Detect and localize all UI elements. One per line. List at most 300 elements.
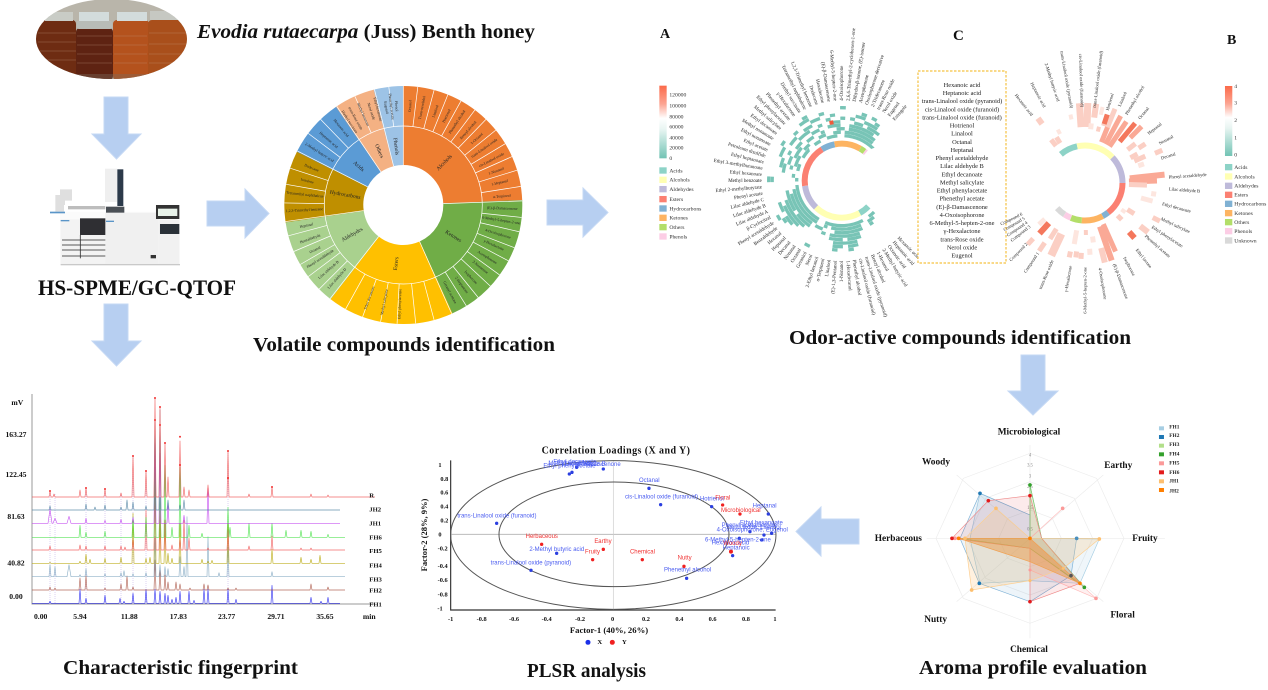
fingerprint: sample labels: FH6	[369, 535, 383, 542]
PLSR: X loadings: Methyl salicylate	[548, 461, 593, 467]
legend: panel A colour scale and categories: Alcohols	[669, 178, 690, 184]
sunburst: category labels	[329, 137, 462, 271]
title: honey sample: Evodia rutaecarpa (Juss) Benth honey	[196, 21, 535, 43]
heatmap B: compound labels: Heptanal	[1147, 121, 1163, 136]
PLSR: tick labels: 1	[438, 462, 442, 469]
heatmap B: compound labels: trans-Linalool oxide (furanoid)	[1092, 50, 1104, 108]
sunburst: compound labels: Phenol	[394, 101, 399, 112]
heatmap B: compound labels: 2-Methyl butyric acid	[1044, 62, 1061, 103]
panel: odor-active compound list: Hotrienol	[950, 122, 974, 130]
fingerprint: axis labels: 40.82	[7, 558, 25, 567]
sunburst: compound labels: Linalool	[432, 105, 440, 118]
sunburst: compound labels: 1-Heptanol	[491, 179, 509, 187]
legend: panel A colour scale and categories: 80000	[669, 114, 684, 120]
PLSR: Y loadings: Chemical	[630, 550, 655, 556]
heatmap B: compound labels: Compound 1	[1023, 251, 1040, 274]
sunburst: compound labels: Eugenol	[383, 101, 389, 114]
heatmap B: compound labels: trans-Linalool oxide (pyranoid)	[1059, 51, 1074, 109]
PLSR: X loadings: cis-Linalool oxide (furanoid)	[625, 495, 698, 501]
legend: panel B colour scale and categories: 2	[1234, 118, 1237, 124]
heatmap A: compound labels: Linalool	[825, 259, 833, 277]
sunburst: compound labels: γ-Hexalactone	[483, 239, 505, 252]
heatmap B: compound labels: 4-Oxoisophorone	[1097, 267, 1108, 300]
panel: odor-active compound list: Methyl salicylate	[940, 180, 984, 186]
heatmap A: compound labels: Ethyl acetate	[742, 139, 769, 154]
sunburst: compound labels: trans-Rose oxide	[347, 106, 363, 131]
panel: odor-active compound list: Heptanoic acid	[943, 90, 982, 97]
heatmap B: compound labels: Ethyl lactate	[1135, 248, 1153, 269]
heatmap B: compound labels: Ethyl phenylacetate	[1151, 224, 1184, 248]
title: PLSR: PLSR analysis	[527, 660, 646, 682]
panel: odor-active compound list: Lilac aldehyde B	[940, 163, 984, 170]
heatmap A: compound labels: Nonanal	[783, 244, 798, 261]
radar: axis values	[1027, 453, 1034, 532]
heatmap A: compound labels: trans-Rose oxide	[877, 78, 897, 111]
PLSR: x-axis title: Factor-1 (40%, 26%)	[570, 625, 648, 635]
panel: odor-active compound list: Ethyl phenylacetate	[937, 188, 987, 194]
heatmap A: compound labels: 1-Hexadecanol	[844, 260, 852, 292]
heatmap B: compound labels: Compound 2	[1008, 241, 1029, 262]
title: odor-active compounds: Odor-active compounds identification	[789, 327, 1131, 349]
legend: panel B colour scale and categories: Aldehydes	[1234, 184, 1259, 190]
panel: odor-active compound list: Octanal	[952, 139, 972, 146]
PLSR: tick labels: -0.2	[438, 546, 448, 553]
sunburst: category labels: Acids	[352, 160, 365, 173]
heatmap A: compound labels: Phenethyl alcohol	[851, 259, 861, 296]
heatmap B: compound labels	[1000, 50, 1207, 314]
radar: axis labels: Chemical	[1010, 645, 1048, 655]
legend: panel B colour scale and categories: Esters	[1234, 193, 1248, 199]
PLSR: X loadings: Lilac aldehyde B	[562, 462, 606, 468]
heatmap B: compound labels: Phenyl acetaldehyde	[1169, 172, 1207, 180]
PLSR: X loadings: Octanal	[639, 478, 660, 484]
panel: odor-active compound list: 4-Oxoisophorone	[940, 212, 985, 219]
heatmap A: compound labels: Ethyl hexanoate	[729, 170, 763, 178]
sunburst: compound labels: Nerol oxide	[366, 102, 376, 121]
sunburst: compound labels: 1,2,3-Trimethyl benzene	[286, 207, 324, 214]
sunburst: outer ring	[264, 66, 542, 344]
heatmap B: compound labels: Isophorone	[1122, 256, 1136, 277]
heatmap A: compound labels: Hexanoic acid	[896, 236, 920, 260]
sunburst: compound labels	[286, 93, 521, 319]
radar: axis labels	[875, 427, 1158, 655]
fingerprint: sample labels: FH2	[369, 587, 383, 594]
radar: axis labels: Floral	[1110, 611, 1135, 621]
sunburst: compound labels: 2-Methyl butyric acid	[304, 142, 335, 163]
heatmap A: compound labels: γ-Hexalactone	[775, 92, 796, 119]
fingerprint: axes	[32, 394, 375, 604]
radar: legend: FH5	[1169, 461, 1180, 467]
legend: panel B colour scale and categories: 1	[1234, 135, 1237, 141]
heatmap A: compound labels: Heptanal	[771, 236, 788, 253]
fingerprint: trace JH1	[32, 443, 340, 523]
PLSR: tick labels: 0.4	[675, 616, 684, 623]
radar: legend: FH2	[1169, 433, 1180, 439]
PLSR: tick labels: -0.8	[438, 591, 448, 598]
heatmap A: compound labels: Eugenol	[888, 101, 902, 118]
PLSR: tick labels: -0.6	[438, 577, 448, 584]
title: volatile compounds: Volatile compounds identification	[253, 334, 555, 356]
sunburst: compound labels: Lilac aldehyde B	[317, 260, 340, 280]
sunburst: compound labels: 1-Octanol	[470, 132, 484, 145]
PLSR: X loadings: Heptanoic	[723, 546, 750, 552]
panel: odor-active compound list: Linalool	[951, 130, 973, 138]
sunburst: compound labels: Trans-nerolidol	[418, 96, 426, 120]
radar: axis values: 0.5	[1027, 527, 1034, 532]
PLSR: Y loadings: Herbaceous	[526, 534, 558, 540]
sunburst: compound labels: 1-Nonanol	[488, 166, 505, 176]
sunburst: compound labels: Phenethyl alcohol	[448, 109, 466, 135]
heatmap A: compound labels: α-Terpineol	[816, 258, 827, 282]
legend: panel B colour scale and categories: Unknown	[1234, 238, 1257, 244]
heatmap A: cells	[738, 77, 945, 284]
heatmap A: compound labels: trans-Linalool oxide (pyranoid)	[863, 256, 887, 318]
heatmap B: compound labels: 6-Methyl-5-hepten-2-one	[1082, 267, 1088, 314]
fingerprint: axis labels: mV	[11, 398, 24, 407]
sunburst: compound labels: Diethyl succinate	[340, 110, 358, 134]
panel: odor-active compound list: Phenethyl acetate	[940, 196, 985, 202]
fingerprint: axis labels: 122.45	[5, 470, 27, 479]
fingerprint: trace R	[32, 398, 375, 497]
panel: odor-active compound list: Hexanoic acid	[944, 82, 981, 89]
sunburst: compound labels: Lilac aldehyde D	[327, 267, 347, 290]
PLSR: X loadings: Phenyl acetaldehyde	[722, 523, 778, 529]
heatmap B: cells	[1026, 103, 1165, 263]
fingerprint: trace FH1	[32, 585, 340, 603]
heatmap A: compound labels: Phenethyl acetate	[764, 92, 791, 123]
PLSR: X loadings: 6-Methyl-5-hepten-2-one	[705, 538, 772, 544]
fingerprint: axis labels: 0.00	[9, 592, 23, 601]
heatmap B: compound labels: Methyl salicylate	[1160, 216, 1191, 234]
PLSR: tick labels: 0	[611, 616, 614, 623]
fingerprint: axis labels: 23.77	[218, 612, 235, 621]
radar: axis labels: Herbaceous	[875, 534, 922, 544]
sunburst: compound labels: Acetophenone	[477, 250, 498, 265]
heatmap A: compound labels: Methyl salicylate	[752, 105, 782, 132]
heatmap B: compound labels: Ethyl decanoate	[1162, 201, 1191, 214]
heatmap A: compound labels: Petroleum disulfide	[727, 142, 767, 160]
legend: panel A colour scale and categories: 120000	[669, 93, 686, 99]
heatmap A: compound labels: Lilac aldehyde A	[736, 210, 769, 228]
panel: odor-active compound list: trans-Linalool oxide (furanoid)	[922, 114, 1002, 122]
fingerprint: axis labels: 5.94	[73, 612, 87, 621]
arrow: volatile to odor-active	[547, 188, 608, 237]
panel: odor-active compound list: Eugenol	[951, 252, 973, 260]
heatmap A: compound labels: Ethyl 3-methylbutanoate	[713, 159, 764, 172]
sunburst: compound labels: Octanol	[408, 100, 413, 112]
legend: panel B colour scale and categories: Others	[1234, 220, 1249, 226]
heatmap A: compound labels: Ethyl nonanoate	[740, 128, 772, 148]
heatmap A: compound labels: Lilac aldehyde C	[730, 198, 765, 211]
sunburst: compound labels: Dodecane	[304, 163, 320, 173]
fingerprint: sample labels	[369, 493, 383, 608]
legend: panel A colour scale and categories: Ketones	[669, 216, 688, 222]
fingerprint: trace FH5	[32, 490, 345, 550]
sunburst: compound labels: Hexanoic acid	[333, 118, 349, 138]
sunburst: compound labels: Isophorone	[464, 270, 478, 285]
heatmap B: compound labels: Compound 3	[1009, 224, 1032, 243]
sunburst: compound labels: trans-Linalool oxide	[471, 138, 498, 159]
radar: axis values: 2.5	[1027, 485, 1034, 490]
sunburst: compound labels: Methyl benzoate	[356, 102, 370, 127]
sunburst: compound labels: Geranyl acetone	[442, 281, 458, 305]
PLSR: tick labels: -0.8	[477, 616, 487, 623]
fingerprint: axis labels: min	[363, 612, 376, 621]
PLSR: tick labels: -0.4	[438, 563, 449, 570]
radar: axis values: 1.5	[1027, 506, 1034, 511]
fingerprint: axis labels: 11.88	[121, 612, 138, 621]
heatmap A: compound labels: Methyl nonanoate	[741, 119, 775, 142]
legend: panel A colour scale and categories: 0	[669, 156, 672, 162]
sunburst: category labels: Aldehydes	[341, 226, 364, 243]
legend: panel A colour scale and categories: Esters	[669, 197, 683, 203]
legend: panel B colour scale and categories: 3	[1234, 101, 1237, 107]
PLSR: Y loadings: Floral	[715, 495, 730, 501]
heatmap B: compound labels: cis-Linalool oxide (furanoid)	[1078, 54, 1085, 108]
heatmap B: compound labels: Hotrienol	[1105, 92, 1115, 111]
PLSR: X loadings: Ethyl phenylacetate	[543, 463, 596, 469]
PLSR: Y loadings: Fruity	[585, 549, 600, 555]
PLSR: tick labels: 1	[773, 616, 777, 623]
PLSR: X loadings: Nerol oxide, Linalool	[727, 525, 781, 531]
heatmap A: compound labels: Decanal	[778, 240, 793, 256]
title: aroma profile: Aroma profile evaluation	[919, 657, 1147, 679]
radar: axis values: 3	[1029, 474, 1032, 479]
sunburst: compound labels: Heptanal	[299, 222, 314, 229]
sunburst: compound labels: 4-Oxoisophorone	[485, 228, 512, 240]
fingerprint: trace FH6	[32, 465, 345, 537]
heatmap A: compound labels: Ethyl 2-methylbutyrate	[715, 185, 763, 194]
heatmap B: compound labels: Decanal	[1160, 151, 1177, 161]
legend: panel A colour scale and categories: Hydrocarbons	[669, 206, 701, 212]
sunburst: compound labels: 2-Nonanone	[472, 260, 489, 275]
fingerprint: axis labels: 81.63	[7, 512, 25, 521]
PLSR: chart title: Correlation Loadings (X and Y)	[542, 446, 690, 457]
heatmap A: compound labels: cis-Linalool oxide (furanoid)	[857, 258, 875, 316]
heatmap A: compound labels: 1-Hexanol	[875, 251, 889, 273]
sunburst: compound labels: 2-Heptanone	[454, 276, 469, 294]
radar: axis labels: Nutty	[924, 615, 947, 625]
PLSR: tick labels: 0.6	[709, 616, 717, 623]
heatmap A: compound labels: Diethyl succinate	[779, 82, 802, 115]
sunburst: compound labels: Methyl salicylate	[380, 289, 389, 315]
heatmap A: highest value cell	[829, 120, 834, 125]
legend: panel A colour scale and categories: Acids	[669, 168, 683, 174]
heatmap A: compound labels: Dodecane	[807, 85, 819, 106]
fingerprint: trace FH2	[32, 560, 345, 590]
PLSR: tick labels: 0.6	[440, 490, 448, 497]
fingerprint: axis labels: 17.83	[170, 612, 187, 621]
PLSR: Y loadings: Woody	[723, 541, 742, 547]
fingerprint: sample labels: JH2	[369, 507, 382, 514]
PLSR: X loadings	[457, 460, 788, 580]
sunburst: compound labels: Ethyl decanoate	[363, 286, 376, 310]
PLSR: Y loadings: Earthy	[594, 539, 612, 545]
heatmap A: compound labels: Hexadecane	[814, 79, 825, 104]
panel: odor-active compound list	[918, 71, 1006, 263]
fingerprint: sample labels: FH5	[369, 548, 383, 555]
title: fingerprint: Characteristic fingerprint	[63, 657, 298, 679]
panel: odor-active compound list: cis-Linalool oxide (furanoid)	[925, 106, 999, 114]
heatmap A: compound labels: 4-Oxoisophorone	[840, 65, 845, 101]
fingerprint: sample labels: FH1	[369, 601, 382, 608]
sunburst: compound labels: Heptanoic acid	[319, 131, 339, 149]
panel letter A: A	[660, 27, 671, 42]
fingerprint: axis labels: 163.27	[5, 430, 27, 439]
panel: odor-active compound list: Heptanal	[950, 147, 974, 154]
PLSR: X loadings: Heptanal	[753, 503, 777, 509]
radar: axis values: 4	[1029, 453, 1032, 458]
PLSR: axes frame and ellipses	[451, 460, 776, 610]
radar: legend: FH1	[1169, 424, 1180, 430]
radar: legend: JH1	[1169, 479, 1179, 485]
radar: axis labels: Microbiological	[998, 427, 1061, 437]
panel: odor-active compound list: γ-Hexalactone	[943, 228, 981, 235]
fingerprint: retention guides	[50, 451, 228, 603]
PLSR: X loadings: Hexanoic acid	[712, 541, 749, 547]
heatmap A: compound labels: 2-Methyl butyric acid	[881, 248, 908, 288]
heatmap A: compound labels: Benzyl alcohol	[869, 254, 885, 284]
fingerprint: axis labels: 29.71	[267, 612, 285, 621]
heatmap B: compound labels: Hexanoic acid	[1014, 93, 1034, 117]
title: instrument: HS-SPME/GC-QTOF	[38, 275, 236, 300]
PLSR: X loadings: 4-Oxoisophorone, Eugenol	[717, 528, 788, 534]
heatmap A: compound labels: Oxoisophorone derivative	[865, 54, 886, 106]
heatmap B: compound labels: Phenethyl alcohol	[1124, 84, 1146, 116]
legend: panel A colour scale and categories: 100000	[669, 103, 686, 109]
sunburst: compound labels: (E)-β-Damascenone	[487, 206, 518, 211]
sunburst: compound labels: Ionolene	[300, 178, 314, 185]
arrow: odor-active to aroma profile	[1008, 355, 1058, 415]
heatmap B: compound labels: Heptanoic acid	[1029, 81, 1047, 109]
panel: odor-active compound list: Nerol oxide	[947, 244, 977, 252]
heatmap B: compound labels: Compound 5	[1002, 215, 1026, 232]
panel: odor-active compound list: trans-Rose oxide	[940, 236, 984, 244]
PLSR: tick labels: -1	[448, 616, 453, 623]
fingerprint: sample labels: FH3	[369, 577, 383, 584]
legend: panel B colour scale and categories: Phenols	[1234, 229, 1252, 235]
photo: honey jars	[30, 0, 195, 80]
PLSR: tick labels: -0.2	[575, 616, 585, 623]
PLSR: X loadings: Phenethyl alcohol	[664, 567, 711, 573]
panel letter C: C	[953, 28, 964, 44]
sunburst: compound labels: Phenethyl acetate	[388, 93, 395, 121]
panel: odor-active compound list: (E)-β-Damascenone	[936, 204, 988, 211]
chart: panel A circular heatmap	[713, 27, 945, 318]
heatmap A: compound labels: Lilac aldehyde B	[733, 204, 767, 219]
radar: series markers	[950, 483, 1101, 603]
heatmap A: compound labels: (E)-β-Damascenone	[819, 62, 831, 103]
heatmap B: compound labels: Linalool	[1117, 90, 1128, 107]
fingerprint: trace FH4	[32, 473, 345, 563]
panel: odor-active compound list: Ethyl decanoate	[942, 172, 983, 178]
PLSR: X loadings: 2-Methyl butyric acid	[529, 547, 584, 553]
heatmap A: compound labels: Ethyl heptanoate	[730, 153, 765, 166]
radar: legend: FH6	[1169, 470, 1180, 476]
PLSR: X loadings: Ethyl decanoate	[553, 460, 597, 466]
legend: panel A colour scale and categories: Others	[669, 225, 684, 231]
legend: panel A colour scale and categories	[659, 86, 701, 240]
sunburst: compound labels: Tetramethyl naphthalene	[286, 191, 324, 199]
arrow: aroma profile to PLSR	[796, 507, 859, 556]
PLSR: X loadings: Ethyl hexanoate	[740, 520, 784, 526]
arrow: instrument to fingerprint	[92, 304, 141, 366]
chart: chromatographic fingerprint	[5, 394, 383, 621]
PLSR: X loadings: Hotrienol	[700, 497, 724, 503]
heatmap A: compound labels: Nerol oxide	[882, 91, 899, 114]
heatmap A: compound labels: 1-Nonanol	[840, 260, 845, 282]
radar: axis labels: Fruity	[1132, 534, 1158, 544]
heatmap A: compound labels: Benzaldehyde	[753, 226, 780, 247]
sunburst: compound labels: Ethyl hexanoate	[373, 97, 383, 122]
PLSR: tick labels	[437, 462, 777, 623]
fingerprint: axis labels	[5, 398, 376, 621]
heatmap A: compound labels: Ethyl decanoate	[749, 114, 778, 137]
radar: axis labels: Earthy	[1104, 461, 1133, 471]
heatmap A: compound labels: Geraniol	[796, 251, 809, 269]
radar: legend: JH2	[1169, 488, 1179, 494]
PLSR: X loadings: trans-Linalool oxide (pyranoid)	[491, 560, 571, 566]
chart: PLSR correlation loadings	[437, 446, 788, 646]
legend: panel B colour scale and categories: Hydrocarbons	[1234, 202, 1266, 208]
heatmap B: compound labels: Lilac aldehyde B	[1169, 186, 1200, 194]
fingerprint: trace FH3	[32, 517, 345, 577]
legend: panel A colour scale and categories: 40000	[669, 135, 684, 141]
heatmap A: category ring	[789, 128, 894, 233]
heatmap B: compound labels: trans-Rose oxide	[1038, 259, 1054, 290]
heatmap B: compound labels: Compound 4	[1006, 220, 1029, 238]
fingerprint: sample labels: R	[369, 493, 374, 500]
heatmap B: category ring	[1032, 130, 1138, 236]
heatmap A: compound labels: 1,2,3-Trimethyl benzene	[789, 61, 813, 109]
heatmap A: compound labels: Methyl benzoate	[728, 179, 762, 184]
heatmap A: compound labels: Phenyl acetate	[734, 192, 764, 201]
heatmap A: compound labels: β-Cyclocitral	[746, 215, 773, 232]
panel letter B: B	[1227, 33, 1236, 48]
PLSR: tick labels: -1	[437, 605, 443, 612]
PLSR: tick labels: -0.4	[542, 616, 552, 623]
legend: panel A colour scale and categories: Phenols	[669, 234, 687, 240]
radar: legend	[1159, 424, 1180, 494]
heatmap A: compound labels: Dihydro-β-ionone, (E)-isomer	[853, 42, 867, 102]
sunburst: segment dividers	[284, 86, 522, 324]
heatmap A: compound labels: Hexanal	[767, 231, 784, 246]
fingerprint: sample labels: JH1	[369, 520, 381, 527]
PLSR: legend: Y	[622, 639, 627, 646]
legend: panel B colour scale and categories	[1225, 84, 1266, 244]
sunburst: category labels: Esters	[393, 257, 400, 271]
heatmap A: compound labels: Estragole	[893, 104, 909, 122]
heatmap A: compound labels: Octanoic acid	[886, 245, 906, 270]
fingerprint: axis labels: 35.65	[316, 612, 334, 621]
heatmap A: compound labels: Acetophenone	[859, 74, 871, 104]
heatmap A: compound labels: Heptanoic acid	[891, 241, 915, 267]
sunburst: compound labels: Benzyl alcohol	[459, 120, 477, 140]
radar: legend: FH4	[1169, 452, 1180, 458]
PLSR: X loadings: β-Damascenone	[577, 462, 621, 468]
PLSR: tick labels: -0.6	[509, 616, 519, 623]
sunburst: compound labels: cis-Linalool oxide	[478, 152, 505, 168]
arrow: instrument to volatile compounds	[207, 189, 269, 238]
heatmap A: compound labels: (E)-1,3-Pentanol	[831, 260, 839, 294]
heatmap A: compound labels: 2-Ethyl hexanol	[806, 256, 820, 288]
fingerprint: peak markers	[49, 397, 273, 492]
heatmap A: compound labels: Octanal	[790, 248, 803, 264]
sunburst: category labels: Ketones	[444, 229, 462, 244]
heatmap A: compound labels: Phenyl acetaldehyde	[738, 221, 776, 247]
panel: odor-active compound list: 6-Methyl-5-hepten-2-one	[930, 220, 995, 227]
sunburst: compound labels: Phenyl acetaldehyde	[306, 249, 335, 269]
